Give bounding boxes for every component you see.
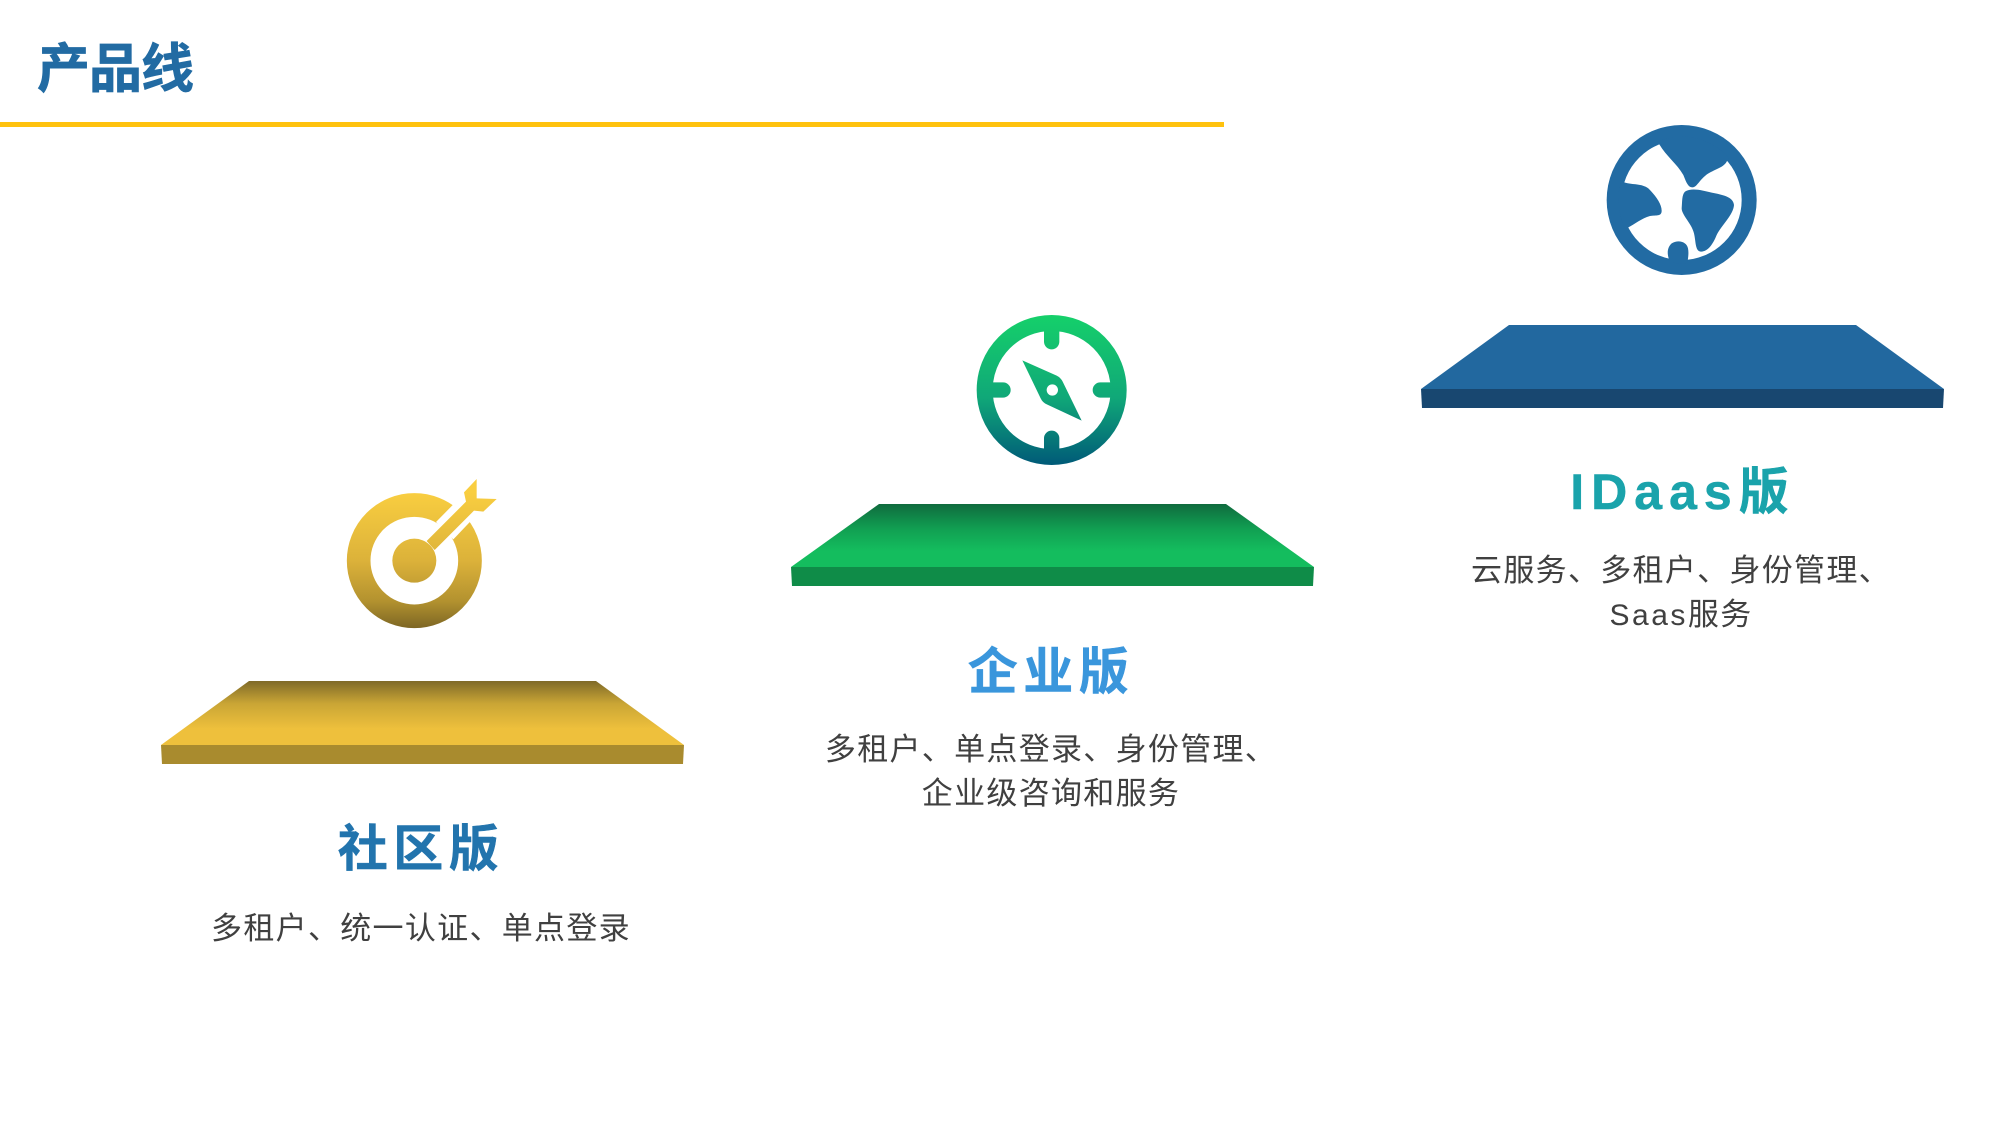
description: 多租户、统一认证、单点登录 — [211, 911, 631, 946]
heading: 企业版: 企业版 — [968, 632, 1134, 704]
panel: community edition — [161, 479, 684, 946]
heading: IDaas版: IDaas版 — [1570, 464, 1796, 520]
description line 2: 企业级咨询和服务 — [922, 776, 1180, 811]
platform: green — [791, 504, 1314, 586]
description: 云服务、多租户、身份管理、 — [1471, 553, 1891, 588]
heading: 社区版: 社区版 — [338, 809, 504, 881]
title underline — [0, 122, 1224, 127]
icon: globe — [1607, 125, 1757, 275]
title: 产品线 — [37, 27, 193, 103]
icon: target with arrow — [359, 479, 497, 616]
panel: enterprise edition — [791, 323, 1314, 811]
icon: compass — [985, 323, 1119, 457]
platform: blue — [1421, 325, 1944, 408]
panel: IDaas edition — [1421, 125, 1944, 632]
description: 多租户、单点登录、身份管理、 — [825, 732, 1277, 767]
platform: gold — [161, 681, 684, 764]
description line 2: Saas服务 — [1610, 597, 1752, 632]
